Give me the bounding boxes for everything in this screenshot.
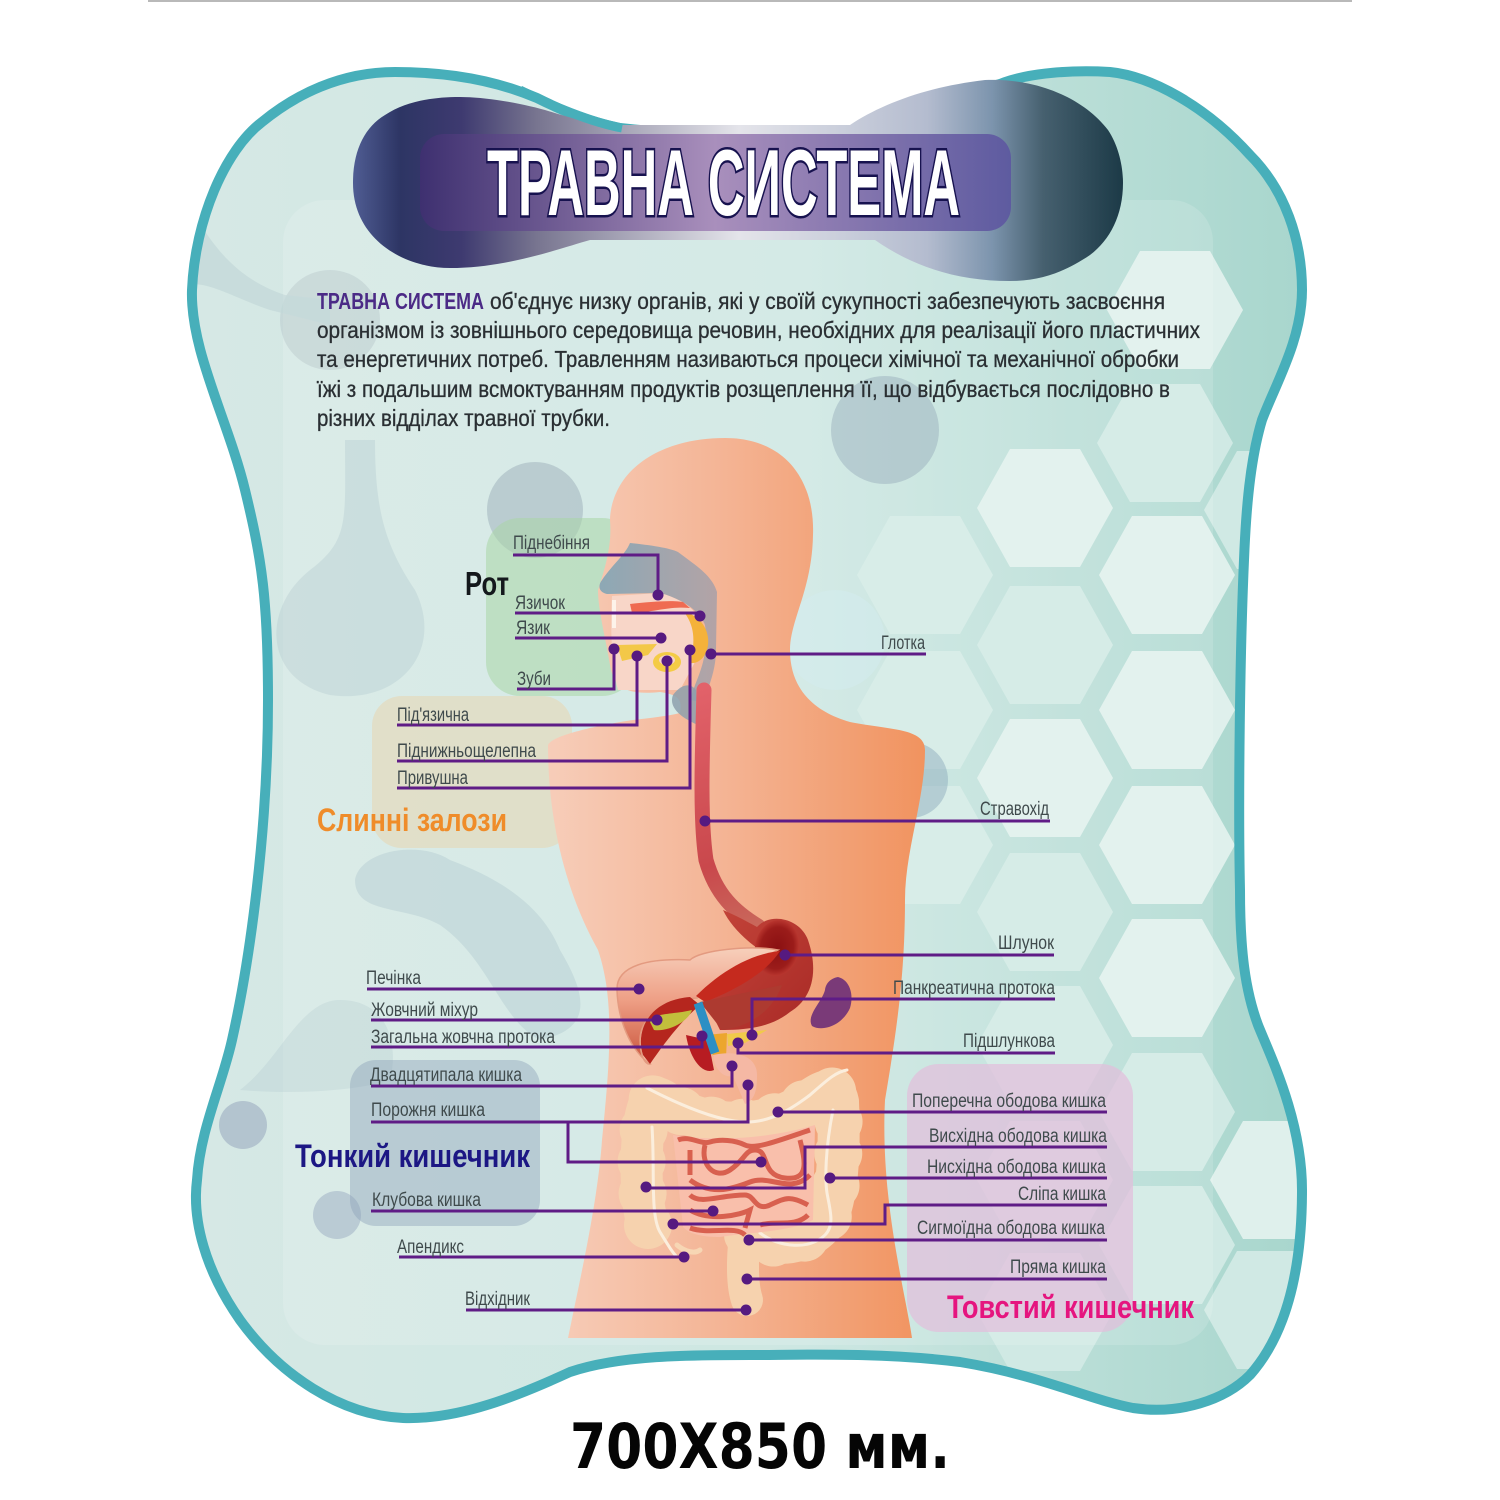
group heading: large intestine: Товстий кишечник — [947, 1289, 1195, 1325]
panel: rounded background board — [190, 71, 1346, 1418]
panel: large intestine highlight — [907, 1064, 1133, 1332]
spleen — [811, 977, 852, 1028]
organ labels: Загальна жовчна протока — [371, 1027, 555, 1048]
organ labels: Печінка — [366, 968, 421, 989]
callout lines — [367, 555, 1107, 1310]
title plate — [420, 134, 1011, 231]
mouth and throat anatomy — [599, 543, 717, 725]
organ labels: Сліпа кишка — [1018, 1184, 1106, 1205]
panel: salivary glands highlight — [372, 696, 572, 848]
title banner — [353, 80, 1123, 281]
group heading: salivary glands: Слинні залози — [317, 802, 507, 838]
size caption: 700X850 мм. — [570, 1410, 950, 1483]
organ labels: Шлунок — [998, 933, 1055, 954]
organ labels: Стравохід — [980, 799, 1049, 820]
organ labels: Піднебіння — [513, 533, 590, 554]
organ labels: Підшлункова — [963, 1031, 1055, 1052]
organ labels: Пряма кишка — [1010, 1257, 1106, 1278]
organ labels: Клубова кишка — [372, 1190, 481, 1211]
top grey rule — [148, 0, 1352, 2]
organ labels: Піднижньощелепна — [397, 741, 536, 762]
duodenum and rectum — [713, 1053, 757, 1104]
human torso silhouette — [548, 438, 925, 1338]
organ labels: Під'язична — [397, 705, 469, 726]
group heading: small intestine: Тонкий кишечник — [295, 1138, 531, 1174]
organ labels: Відхідник — [465, 1289, 531, 1310]
intro paragraph: та енергетичних потреб. Травленням називаються процеси хімічної та механічної обробки — [317, 346, 1179, 372]
title text: ТРАВНА СИСТЕМА — [487, 130, 960, 235]
intro paragraph: ТРАВНА СИСТЕМА — [317, 288, 484, 314]
large intestine — [642, 1070, 847, 1300]
organ labels: Язичок — [515, 593, 566, 614]
intro paragraph: організмом із зовнішнього середовища речовин, необхідних для реалізації його пластичних — [317, 317, 1200, 343]
organ labels: Висхідна ободова кишка — [929, 1126, 1107, 1147]
intro paragraph: різних відділах травної трубки. — [317, 405, 610, 431]
liver — [617, 948, 782, 1064]
organ labels: Жовчний міхур — [371, 1000, 478, 1021]
organ labels: Порожня кишка — [371, 1100, 485, 1121]
group heading: mouth: Рот — [465, 565, 509, 602]
intro paragraph — [316, 288, 1200, 431]
organ labels: Апендикс — [397, 1237, 464, 1258]
organ labels — [366, 533, 1107, 1310]
organ labels: Панкреатична протока — [893, 978, 1055, 999]
small intestine — [673, 1125, 815, 1237]
organ labels: Поперечна ободова кишка — [912, 1091, 1106, 1112]
organ labels: Двадцятипала кишка — [370, 1065, 522, 1086]
intro paragraph: об'єднує низку органів, які у своїй сукупності забезпечують засвоєння — [490, 288, 1165, 314]
organ labels: Зуби — [517, 669, 551, 690]
intro paragraph: їжі з подальшим всмоктуванням продуктів розщеплення її, що відбувається послідовно в — [316, 376, 1170, 402]
stomach — [705, 910, 813, 1030]
esophagus — [702, 690, 758, 926]
organ labels: Язик — [516, 618, 551, 639]
organ labels: Нисхідна ободова кишка — [927, 1157, 1106, 1178]
panel: mouth highlight — [486, 518, 636, 696]
organ labels: Сигмоїдна ободова кишка — [917, 1218, 1105, 1239]
border strand over banner — [520, 90, 622, 128]
callout dots — [608, 590, 836, 1316]
organ labels: Привушна — [397, 768, 468, 789]
organ labels: Глотка — [881, 633, 925, 654]
panel: small intestine highlight — [350, 1060, 540, 1226]
gallbladder and ducts — [650, 1003, 767, 1071]
